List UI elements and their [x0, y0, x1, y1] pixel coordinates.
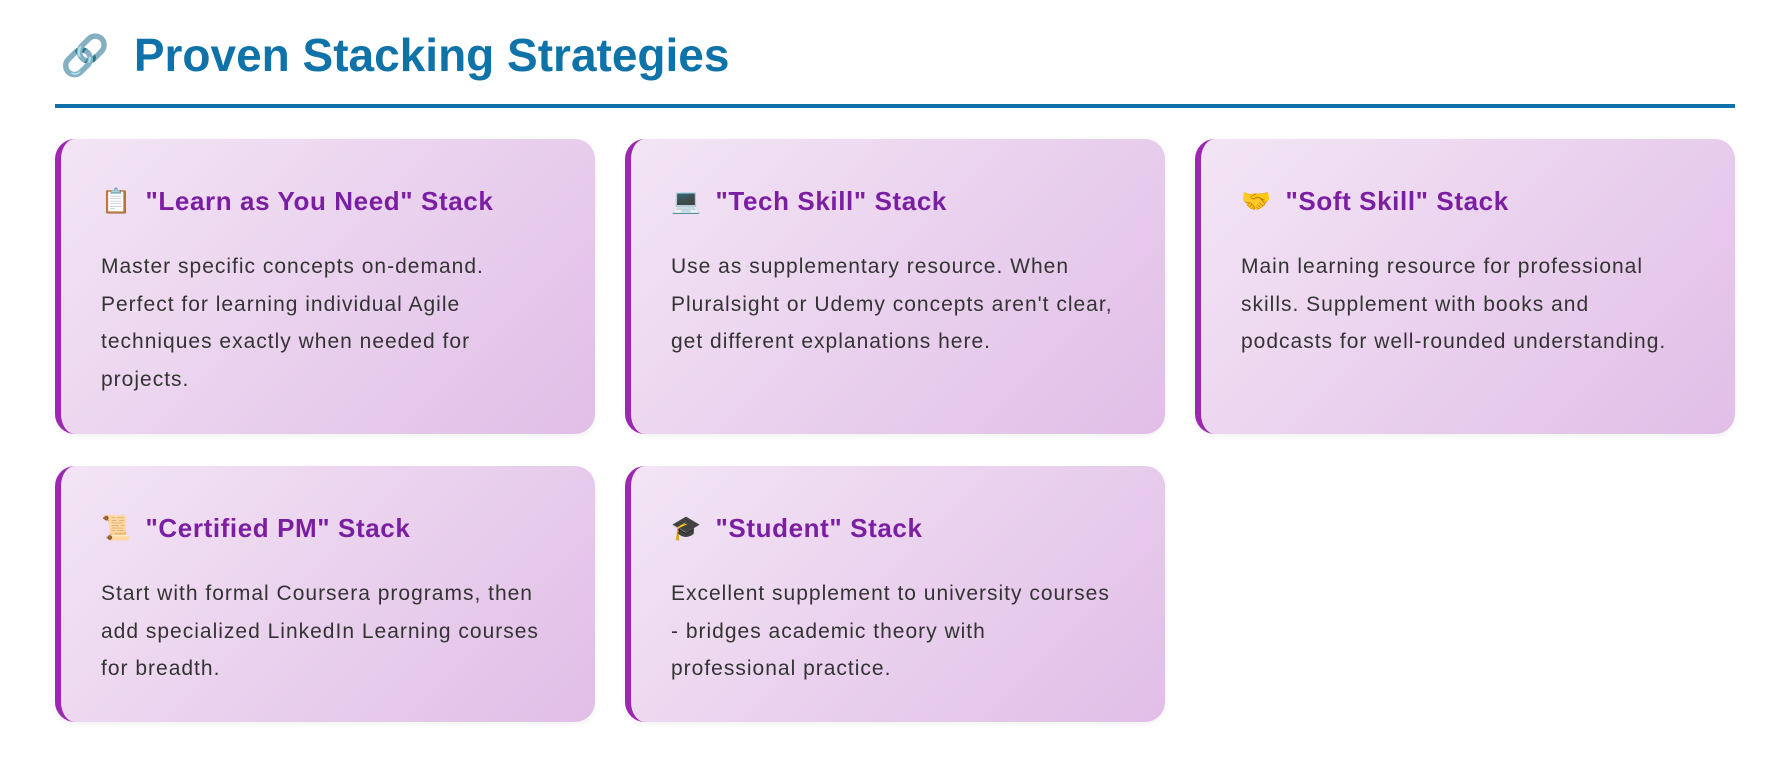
- body text: Use as supplementary resource. When: [671, 255, 1069, 278]
- body text: [671, 582, 1110, 680]
- card: certified PM: [55, 466, 595, 722]
- card: student: [625, 466, 1165, 722]
- body text: - bridges academic theory with: [671, 620, 986, 643]
- heading: 🤝: [1241, 188, 1271, 214]
- body text: Master specific concepts on-demand.: [101, 255, 484, 278]
- heading: 📋: [101, 188, 131, 214]
- heading: "Learn as You Need" Stack: [145, 186, 493, 216]
- body text: [1241, 255, 1666, 353]
- heading: "Student" Stack: [715, 512, 923, 542]
- body text: Perfect for learning individual Agile: [101, 293, 460, 316]
- body text: Pluralsight or Udemy concepts aren't clear,: [671, 293, 1113, 316]
- title: 🔗: [60, 34, 110, 78]
- heading: 🎓: [671, 514, 701, 542]
- body text: get different explanations here.: [671, 330, 991, 353]
- heading: "Soft Skill" Stack: [1285, 186, 1509, 216]
- body text: Start with formal Coursera programs, then: [101, 582, 533, 605]
- body text: Main learning resource for professional: [1241, 255, 1643, 278]
- body text: [101, 255, 484, 391]
- heading: 💻: [671, 188, 701, 214]
- body text: Excellent supplement to university courses: [671, 582, 1110, 605]
- card: soft skill: [1195, 139, 1735, 434]
- card: tech skill: [625, 139, 1165, 434]
- body text: podcasts for well-rounded understanding.: [1241, 330, 1666, 353]
- body text: [671, 255, 1113, 353]
- body text: techniques exactly when needed for: [101, 330, 470, 353]
- title: Proven Stacking Strategies: [134, 29, 729, 81]
- heading: 📜: [101, 514, 131, 542]
- body text: add specialized LinkedIn Learning courses: [101, 620, 539, 643]
- body text: projects.: [101, 368, 189, 391]
- heading: "Tech Skill" Stack: [715, 186, 947, 216]
- heading: "Certified PM" Stack: [145, 512, 410, 542]
- card: learn as you need: [55, 139, 595, 434]
- body text: professional practice.: [671, 657, 891, 680]
- body text: for breadth.: [101, 657, 220, 680]
- body text: [101, 582, 539, 680]
- body text: skills. Supplement with books and: [1241, 293, 1589, 316]
